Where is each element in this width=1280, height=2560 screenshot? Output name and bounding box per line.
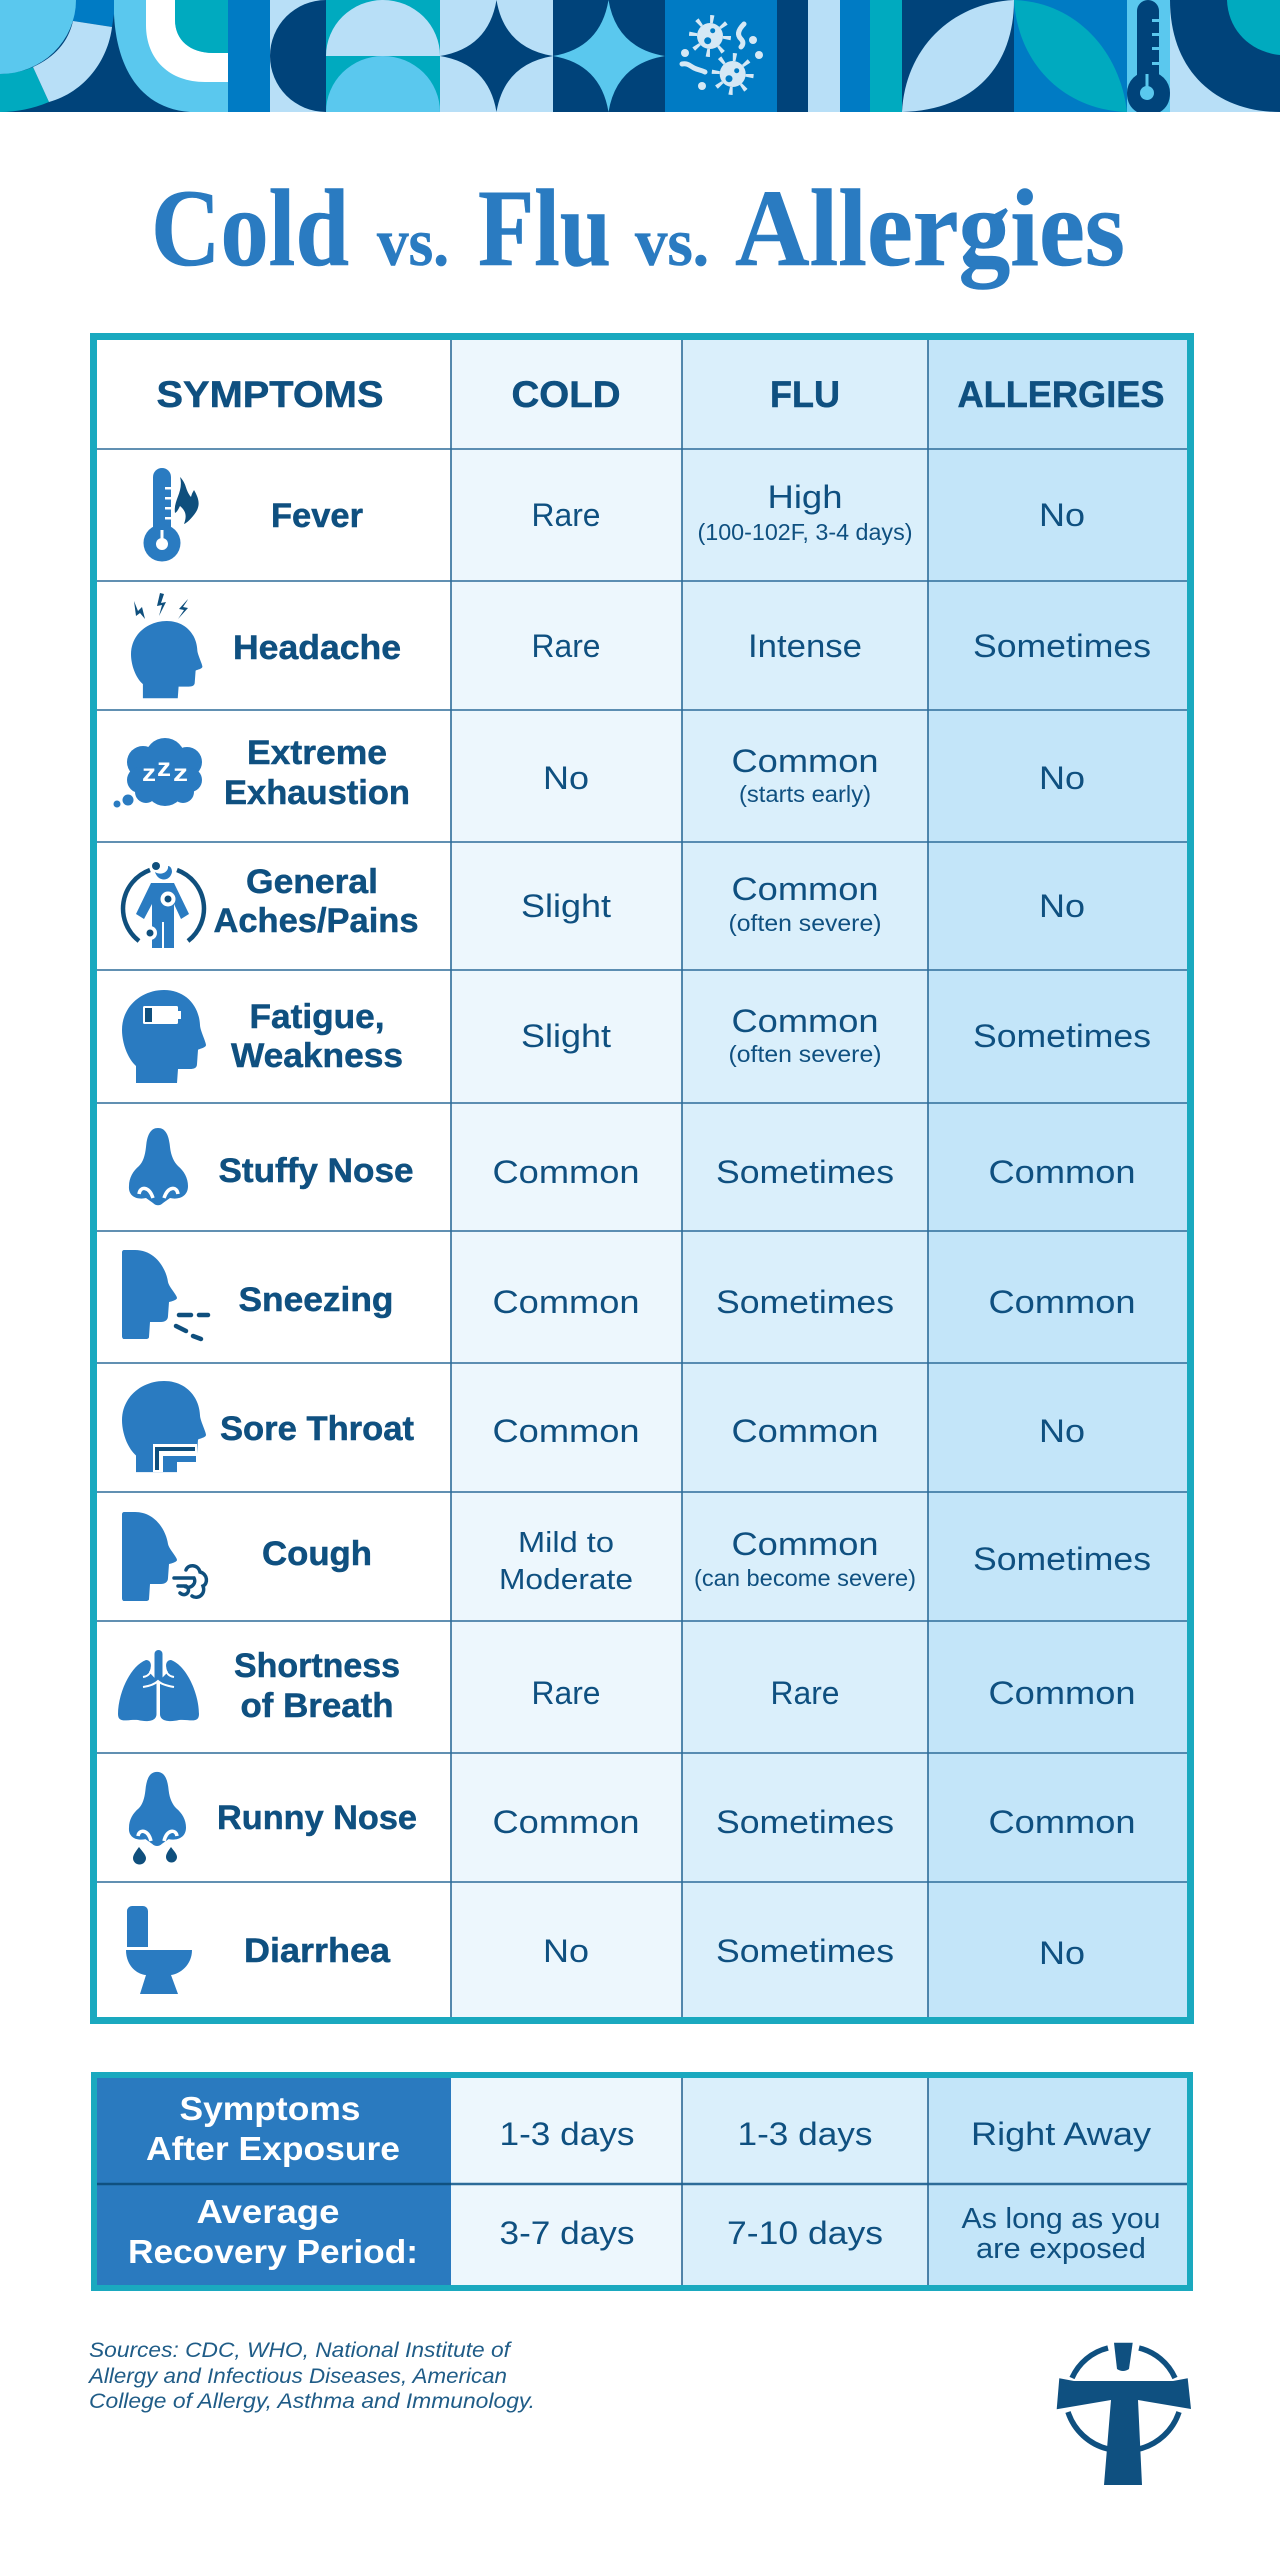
row: stuffy nose: Stuffy Nose [218,1152,414,1190]
row: runny nose: Sometimes [716,1804,894,1840]
icon: nose with drops [129,1772,186,1864]
header row [156,374,1164,415]
row: sore throat: Common [492,1413,640,1449]
row: runny nose: Common [988,1804,1136,1840]
title: vs. [377,204,449,280]
row: sore throat: Sore Throat [220,1410,414,1448]
row: fatigue, weakness: (often severe) [728,1041,882,1067]
icon: head with low battery [122,990,206,1083]
row: fever: Rare [532,497,600,533]
row: cough: Moderate [499,1564,633,1596]
row: fever: No [1039,497,1085,533]
row: runny nose: Runny Nose [217,1799,417,1837]
row: symptoms after exposure: 1-3 days [738,2116,872,2152]
row: fatigue, weakness: Slight [521,1018,611,1054]
row: headache: Rare [532,628,600,664]
row: fever: (100-102F, 3-4 days) [698,519,912,545]
row: symptoms after exposure [146,2090,1151,2167]
icon: lungs [118,1650,199,1721]
sources text: Allergy and Infectious Diseases, American [87,2365,507,2388]
header row: SYMPTOMS [156,374,384,415]
row: fatigue, weakness: Fatigue, [250,998,384,1036]
row: average recovery period [128,2193,1160,2270]
sources text: Sources: CDC, WHO, National Institute of [89,2339,512,2362]
row: general aches and pains: (often severe) [728,910,882,936]
row: cough [122,1512,1151,1601]
icon: nose [129,1128,188,1205]
icon: body with pain points [123,862,204,948]
row: runny nose [129,1772,1136,1864]
logo: tau cross in circle [1057,2343,1191,2485]
title: Cold [151,167,349,289]
row: average recovery period: 3-7 days [500,2215,634,2251]
icon: thought cloud: z [173,760,188,786]
icon: banner thermometer [1127,0,1170,112]
icon: head with throat [122,1381,206,1472]
icon: face sneezing [122,1250,208,1339]
row: fatigue, weakness: Weakness [231,1037,403,1075]
row: sore throat [122,1381,1085,1472]
row: general aches and pains: Aches/Pains [214,902,418,940]
row: extreme exhaustion: Exhaustion [224,774,410,812]
row: headache: Sometimes [973,628,1151,664]
header row: ALLERGIES [958,374,1164,415]
row: extreme exhaustion: No [543,760,589,796]
row: stuffy nose [129,1128,1136,1205]
row: symptoms after exposure: Right Away [971,2116,1151,2152]
row: cough: Cough [262,1535,372,1573]
row: average recovery period: are exposed [976,2233,1146,2265]
icon: thought cloud: z [157,754,171,782]
sources text [87,2339,535,2413]
row: fever: High [768,479,842,515]
row: stuffy nose: Sometimes [716,1154,894,1190]
row: shortness of breath: of Breath [240,1687,394,1725]
row: stuffy nose: Common [492,1154,640,1190]
row: stuffy nose: Common [988,1154,1136,1190]
row: diarrhea: Diarrhea [244,1932,391,1970]
panel: timing table [94,2075,1190,2288]
row: general aches and pains: No [1039,888,1085,924]
row: sneezing: Common [988,1284,1136,1320]
icon: toilet [126,1906,192,1994]
row: average recovery period: Recovery Period: [128,2233,418,2270]
row: sneezing: Common [492,1284,640,1320]
row: shortness of breath: Rare [770,1675,840,1711]
row: diarrhea [126,1906,1085,1994]
row: extreme exhaustion [114,734,1085,812]
row: runny nose: Common [492,1804,640,1840]
title: Flu [478,167,611,289]
row: shortness of breath: Shortness [234,1647,400,1685]
row: diarrhea: Sometimes [716,1933,894,1969]
panel: symptoms comparison table [94,336,1190,2020]
row: average recovery period: As long as you [962,2203,1160,2235]
title: Allergies [735,167,1125,289]
row: symptoms after exposure: 1-3 days [500,2116,634,2152]
row: sneezing: Sometimes [716,1284,894,1320]
icon: thought cloud: z [142,760,156,786]
row: extreme exhaustion: (starts early) [739,781,871,807]
row: general aches and pains: Common [732,871,878,907]
row: general aches and pains: Slight [521,888,611,924]
row: headache: Intense [748,628,862,664]
row: fatigue, weakness [122,990,1151,1083]
row: average recovery period: Average [196,2193,340,2230]
row: extreme exhaustion: Common [732,743,878,779]
header row: COLD [512,374,620,415]
row: symptoms after exposure: Symptoms [180,2090,360,2127]
row: fever [144,468,1085,562]
decorative header banner [0,0,1280,112]
row: fatigue, weakness: Common [732,1003,878,1039]
icon: thermometer with flame [144,468,199,562]
row: average recovery period: 7-10 days [727,2215,883,2251]
title [151,167,1125,289]
row: shortness of breath: Common [988,1675,1136,1711]
row: headache: Headache [233,629,401,667]
row: shortness of breath [118,1647,1136,1725]
icon: thought cloud [114,738,202,808]
icon: head with lightning bolts [131,593,202,698]
row: extreme exhaustion: Extreme [247,734,387,772]
row: sneezing: Sneezing [238,1281,394,1319]
row: fever: Fever [271,497,363,535]
header row: FLU [770,374,840,415]
row: cough: Sometimes [973,1541,1151,1577]
row: sneezing [122,1250,1136,1339]
title: vs. [635,204,709,280]
row: diarrhea: No [1039,1935,1085,1971]
icon: virus and bacteria [681,19,763,91]
row: headache [131,593,1151,698]
icon: face coughing [122,1512,206,1601]
row: cough: (can become severe) [694,1565,916,1591]
row: fatigue, weakness: Sometimes [973,1018,1151,1054]
row: general aches and pains: General [246,863,378,901]
row: cough: Mild to [518,1527,614,1559]
row: diarrhea: No [543,1933,589,1969]
row: sore throat: Common [732,1413,878,1449]
row: shortness of breath: Rare [532,1675,600,1711]
row: symptoms after exposure: After Exposure [146,2130,400,2167]
row: cough: Common [732,1526,878,1562]
row: sore throat: No [1039,1413,1085,1449]
row: general aches and pains [123,862,1085,948]
row: extreme exhaustion: No [1039,760,1085,796]
sources text: College of Allergy, Asthma and Immunology. [89,2390,535,2413]
